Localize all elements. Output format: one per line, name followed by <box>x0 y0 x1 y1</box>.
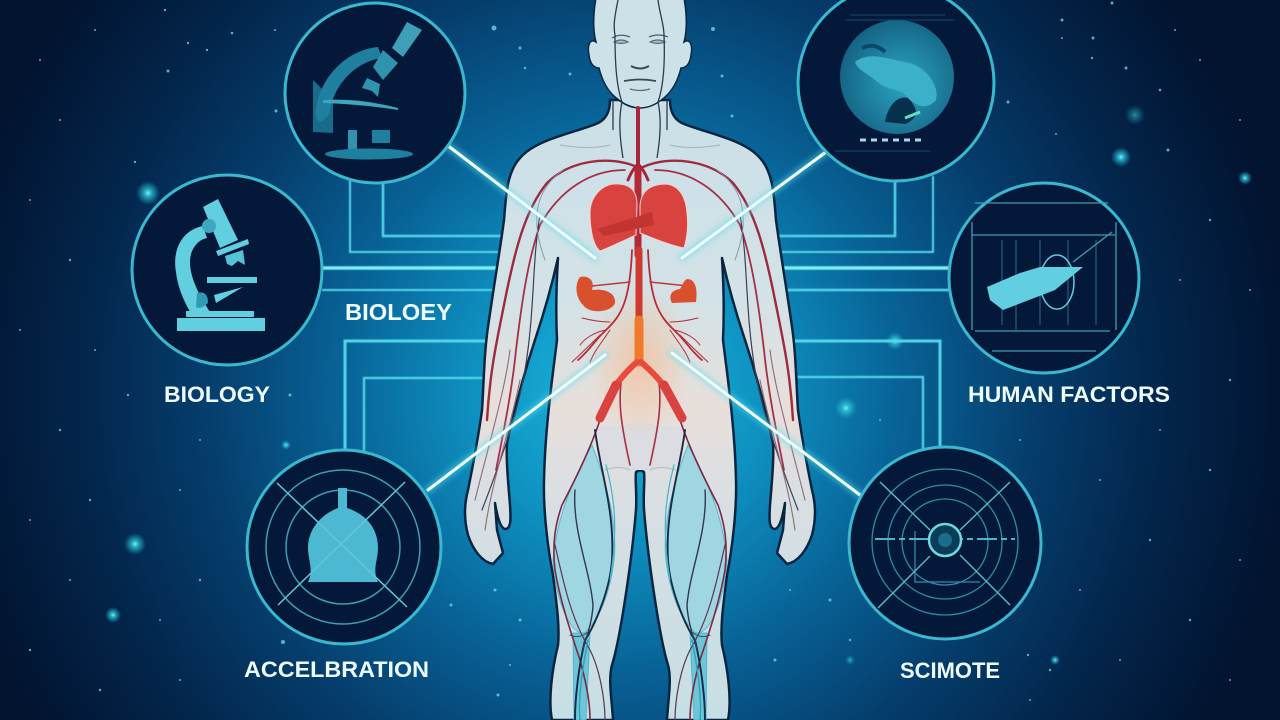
panel: lower right radar diagram <box>849 447 1041 639</box>
label: accelbration: ACCELBRATION <box>244 657 429 682</box>
human figure <box>465 0 815 720</box>
lower abdomen fold <box>597 424 683 470</box>
head <box>588 0 692 108</box>
icon: blue microscope <box>313 22 422 160</box>
warm abdominal glow <box>588 280 692 440</box>
lungs <box>590 184 688 251</box>
icon: light microscope <box>175 199 265 331</box>
label: biology secondary: BIOLOEY <box>345 299 452 325</box>
body silhouette <box>465 100 815 720</box>
panel: left microscope <box>132 175 322 365</box>
label: biology: BIOLOGY <box>164 382 270 407</box>
face features <box>612 35 668 90</box>
label: scimate: SCIMOTE <box>900 658 1000 683</box>
kidneys <box>576 277 697 311</box>
glowing stars <box>105 105 1252 665</box>
panel: lower left radar diagram <box>247 450 441 644</box>
panel: upper left microscope <box>285 3 465 183</box>
label: human factors: HUMAN FACTORS <box>968 382 1170 407</box>
connector lines: right side <box>770 176 950 490</box>
left vessel network <box>475 145 637 720</box>
head and neck veins <box>613 0 667 158</box>
icon: target rings <box>872 469 1018 615</box>
descending aorta <box>600 108 682 418</box>
thigh and shin panels <box>553 445 727 720</box>
panel: right aircraft diagram <box>949 183 1139 373</box>
icon: aircraft schematic <box>972 203 1116 351</box>
icon: scan sphere <box>835 15 955 151</box>
icon: capsule in radar rings <box>266 470 420 624</box>
panel: upper right globe <box>798 0 994 181</box>
white diagonal beams <box>428 145 860 495</box>
connector lines: left side <box>320 178 510 452</box>
right vessel network <box>643 145 805 720</box>
